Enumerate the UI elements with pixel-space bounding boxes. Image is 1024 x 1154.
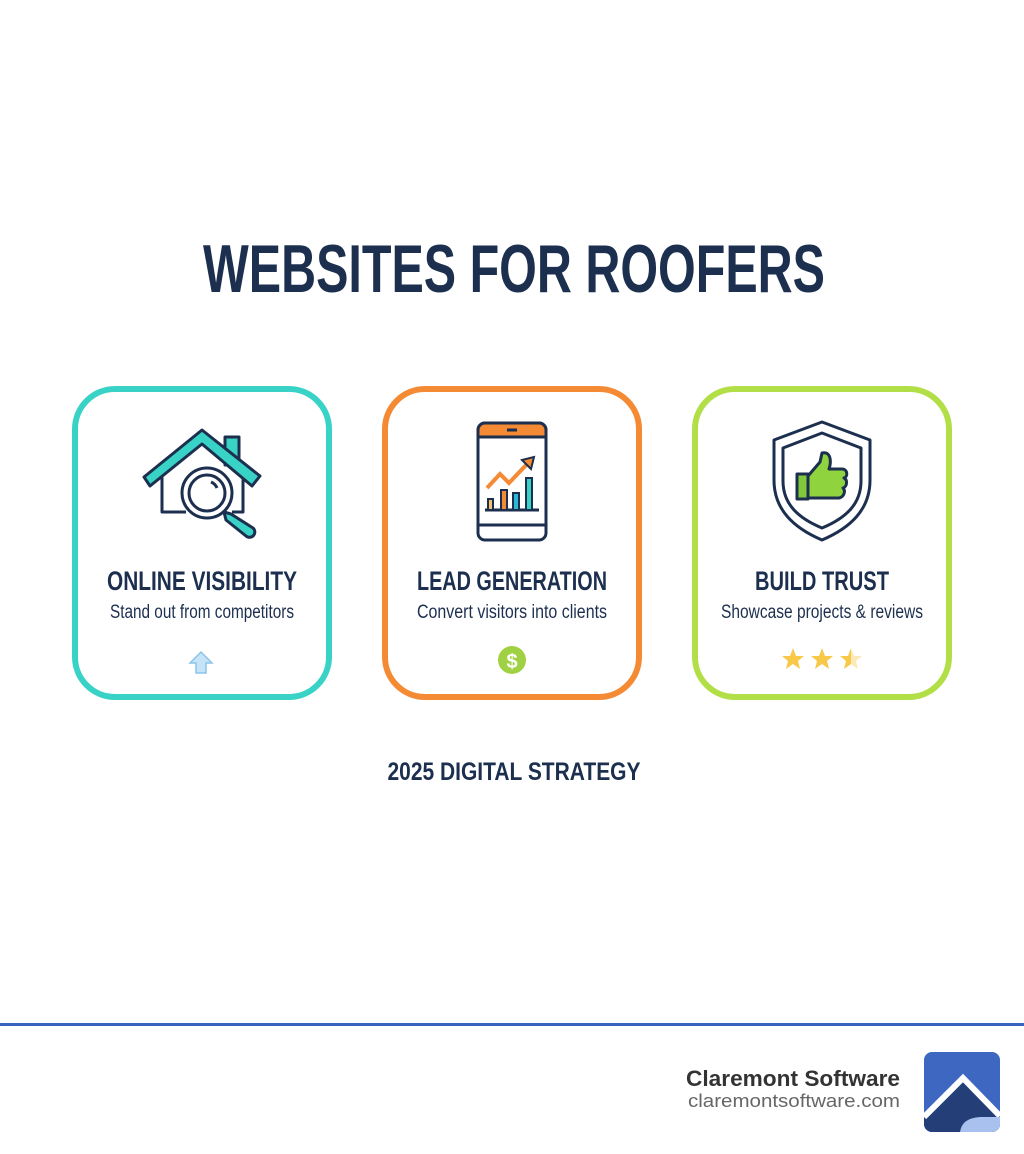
panel: lead generation (385, 389, 639, 697)
panel: online visibility (75, 389, 329, 697)
panel: build trust (695, 389, 949, 697)
footer brand text: Claremont Software (686, 1066, 900, 1091)
heading: ONLINE VISIBILITY (107, 566, 297, 596)
subtext: Showcase projects & reviews (721, 602, 923, 623)
tagline: 2025 DIGITAL STRATEGY (388, 758, 641, 786)
subtext: Convert visitors into clients (417, 602, 607, 623)
logo (924, 1052, 1000, 1132)
icon: dollar (498, 646, 526, 674)
icon: shield thumbs up (774, 422, 870, 540)
heading: BUILD TRUST (755, 566, 889, 596)
subtext: Stand out from competitors (110, 602, 294, 623)
heading: LEAD GENERATION (417, 566, 607, 596)
icon: house with magnifier (144, 430, 260, 537)
icon: stars (782, 648, 862, 669)
footer brand text (686, 1066, 900, 1111)
icon: phone chart (478, 423, 546, 540)
icon: up arrow (190, 652, 212, 673)
footer brand text: claremontsoftware.com (688, 1091, 900, 1111)
icon: dollar: $ (506, 651, 518, 673)
